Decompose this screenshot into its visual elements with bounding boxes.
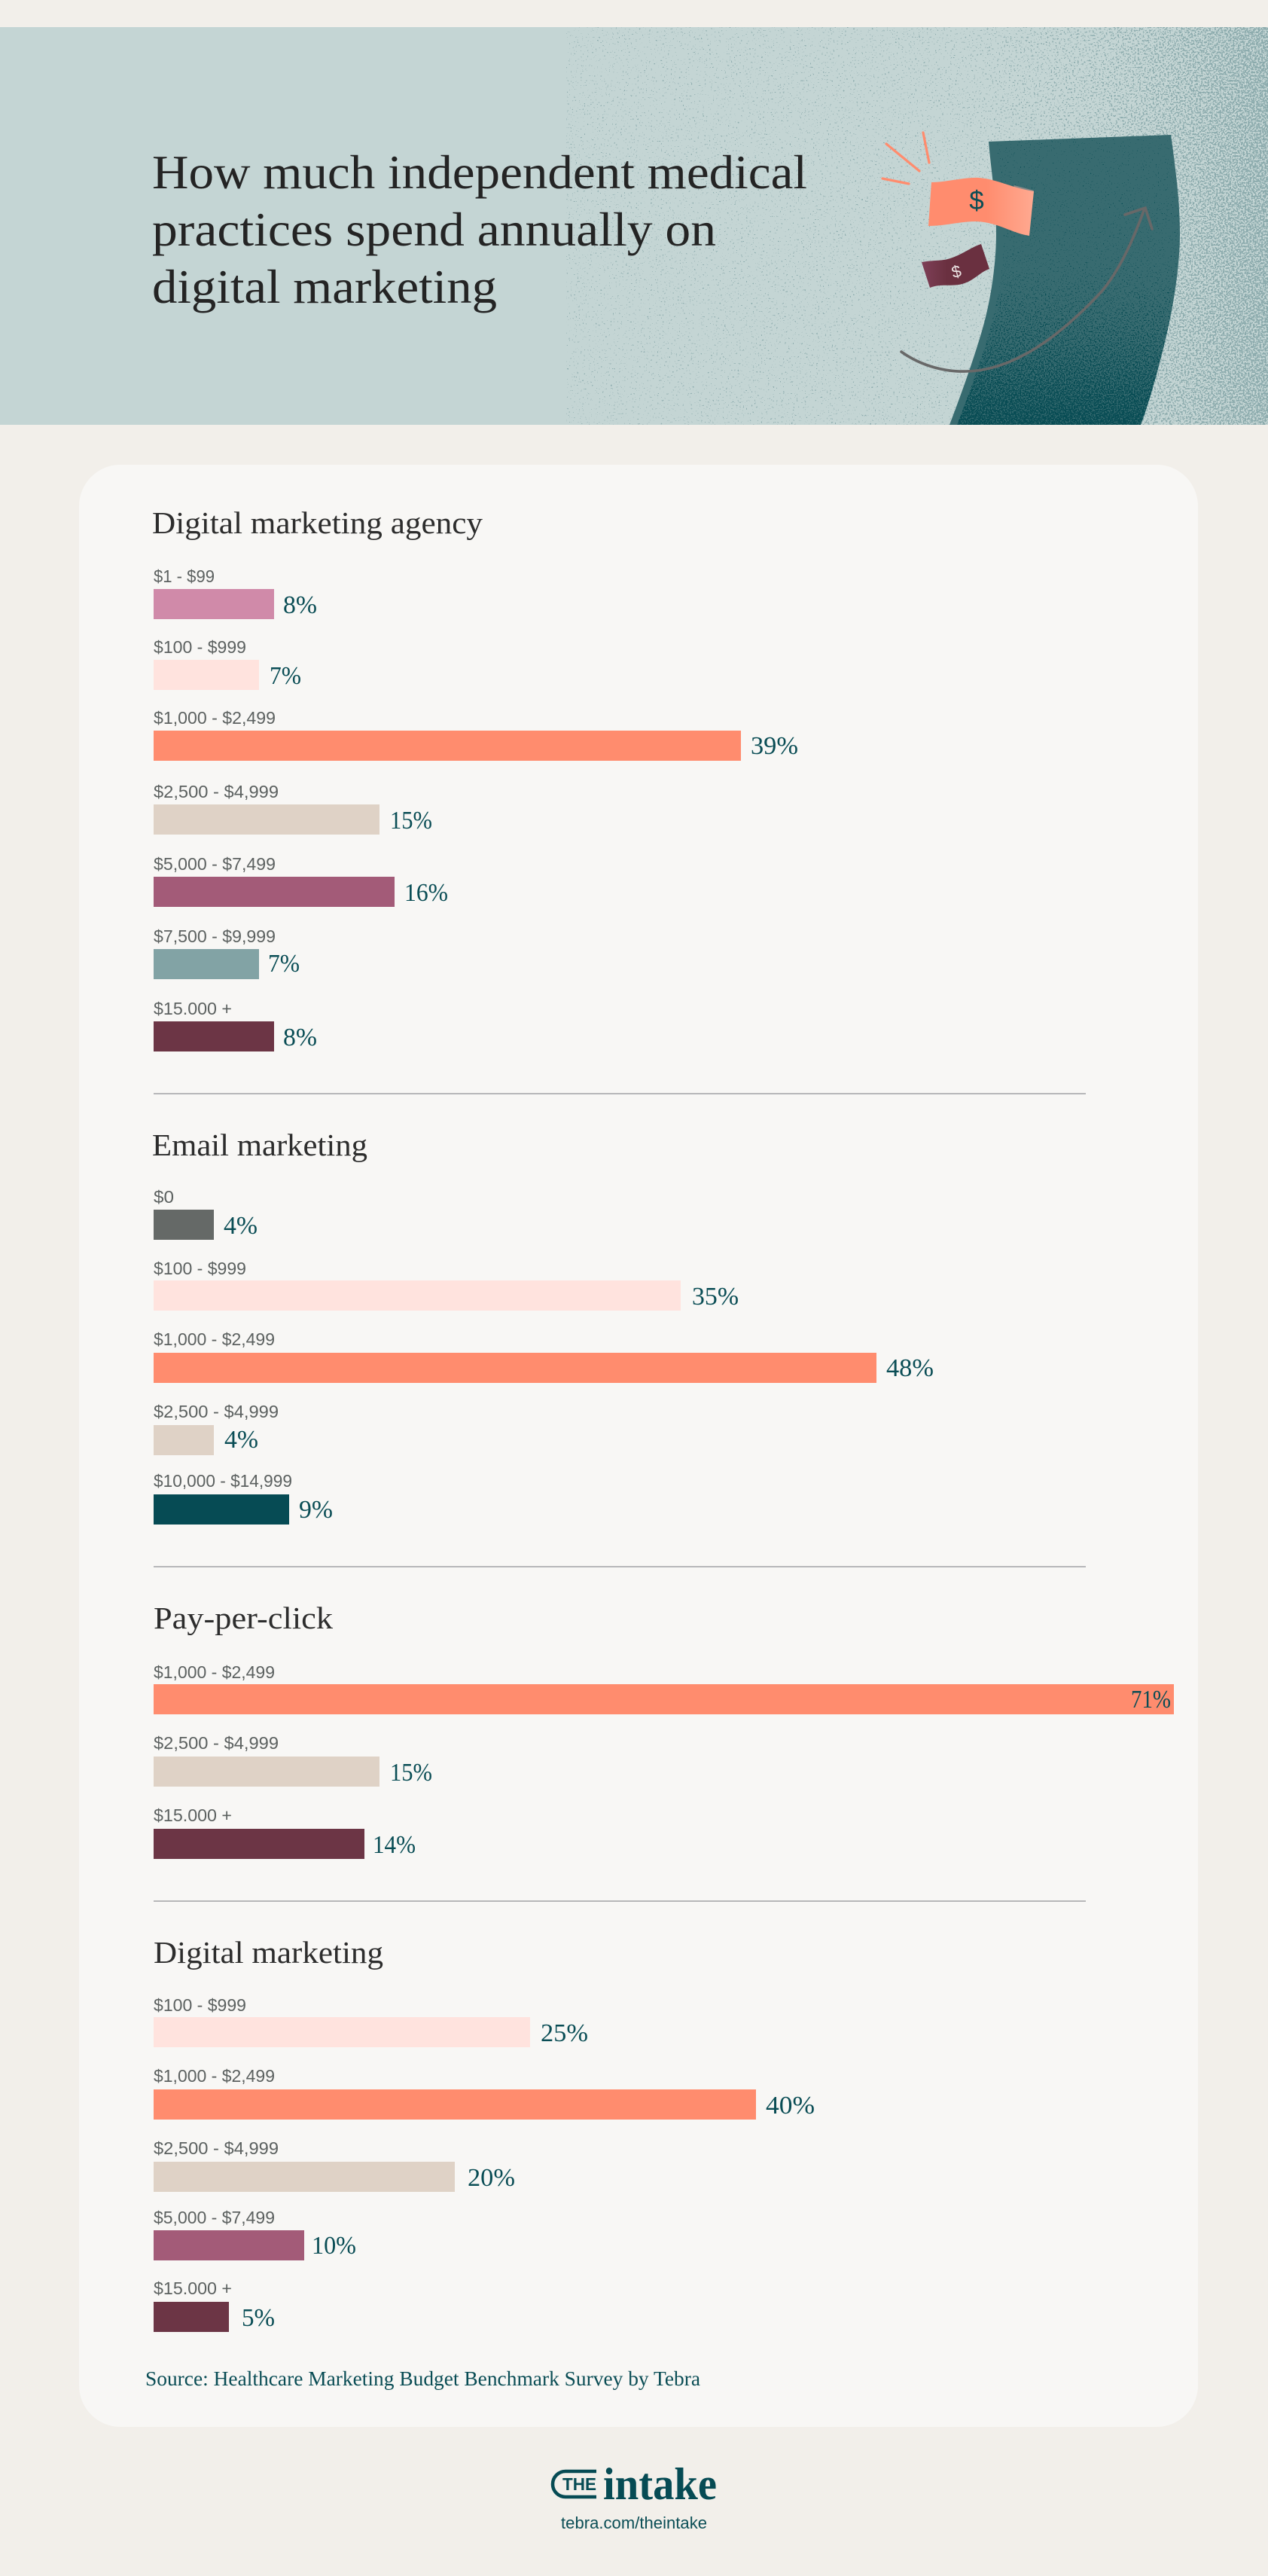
bar: $5,000 - $7,499, 16% xyxy=(154,854,448,907)
bar: $2,500 - $4,999, 20%: 20% xyxy=(468,2164,515,2192)
bar: $1,000 - $2,499, 39%: $1,000 - $2,499 xyxy=(154,708,276,728)
illustration: rising teal arch xyxy=(949,135,1187,425)
bar: $1,000 - $2,499, 48%: 48% xyxy=(886,1354,934,1382)
heading: Pay-per-click xyxy=(154,1601,334,1635)
panel: email marketing xyxy=(152,1128,934,1525)
bar: $15.000 +, 5%: $15.000 + xyxy=(154,2278,232,2298)
bar: $100 - $999, 7% xyxy=(154,637,301,690)
bar: $1,000 - $2,499, 39% xyxy=(154,708,798,761)
source note: Source: Healthcare Marketing Budget Benchmark Survey by Tebra xyxy=(145,2367,700,2390)
title: practices spend annually on xyxy=(152,203,716,256)
bar: $10,000 - $14,999, 9%: $10,000 - $14,999 xyxy=(154,1471,292,1491)
title xyxy=(152,146,807,313)
bar: $2,500 - $4,999, 15% xyxy=(154,782,432,835)
bar: $1 - $99, 8%: 8% xyxy=(283,591,317,619)
bar: $15.000 +, 14%: 14% xyxy=(373,1831,416,1859)
bar: $100 - $999, 7%: 7% xyxy=(270,662,301,690)
bar: $1,000 - $2,499, 48% xyxy=(154,1329,934,1383)
bar: $2,500 - $4,999, 20% xyxy=(154,2138,515,2192)
bar: $2,500 - $4,999, 20%: $2,500 - $4,999 xyxy=(154,2138,279,2158)
bar: $1,000 - $2,499, 71% xyxy=(154,1662,1174,1714)
bar: $100 - $999, 7%: $100 - $999 xyxy=(154,637,246,657)
icon: wine dollar bill: $ xyxy=(949,261,963,282)
bar: $2,500 - $4,999, 15%: $2,500 - $4,999 xyxy=(154,782,279,801)
panel: digital marketing agency xyxy=(152,505,798,1051)
bar: $2,500 - $4,999, 4% xyxy=(154,1402,279,1455)
heading: Digital marketing xyxy=(154,1935,383,1970)
bar: $15.000 +, 5% xyxy=(154,2278,275,2332)
panel: survey results card xyxy=(79,465,1198,2427)
bar: $0, 4%: 4% xyxy=(224,1212,258,1240)
bar: $15.000 +, 8% xyxy=(154,999,317,1051)
bar: $100 - $999, 35%: 35% xyxy=(692,1283,739,1311)
title: How much independent medical xyxy=(152,146,807,199)
bar: $2,500 - $4,999, 15%: $2,500 - $4,999 xyxy=(154,1733,279,1753)
bar: $2,500 - $4,999, 15% xyxy=(154,1733,432,1787)
bar: $0, 4%: $0 xyxy=(154,1187,174,1207)
bar: $15.000 +, 5%: 5% xyxy=(242,2304,275,2332)
bar: $1,000 - $2,499, 48%: $1,000 - $2,499 xyxy=(154,1329,275,1349)
bar: $10,000 - $14,999, 9% xyxy=(154,1471,333,1525)
footer logo: The Intake xyxy=(553,2459,717,2509)
bar: $1,000 - $2,499, 71%: $1,000 - $2,499 xyxy=(154,1662,275,1682)
bar: $7,500 - $9,999, 7%: $7,500 - $9,999 xyxy=(154,926,276,946)
bar: $2,500 - $4,999, 15%: 15% xyxy=(390,807,432,835)
bar: $5,000 - $7,499, 10%: 10% xyxy=(312,2232,356,2260)
bar: $1 - $99, 8% xyxy=(154,566,317,619)
icon: coral spark lines xyxy=(882,133,929,184)
bar: $1 - $99, 8%: $1 - $99 xyxy=(154,566,215,586)
bar: $1,000 - $2,499, 40% xyxy=(154,2066,815,2120)
bar: $5,000 - $7,499, 10%: $5,000 - $7,499 xyxy=(154,2208,275,2227)
bar: $100 - $999, 25%: 25% xyxy=(541,2019,588,2047)
logo wordmark: intake xyxy=(603,2459,717,2509)
bar: $15.000 +, 8%: 8% xyxy=(283,1024,317,1051)
bar: $0, 4% xyxy=(154,1187,258,1240)
footer url: tebra.com/theintake xyxy=(561,2513,707,2532)
arrow: upward growth curve xyxy=(901,208,1152,371)
icon: wine dollar bill xyxy=(922,244,989,288)
panel: pay-per-click xyxy=(154,1601,1174,1859)
bar: $100 - $999, 25% xyxy=(154,1995,588,2047)
bar: $1,000 - $2,499, 39%: 39% xyxy=(751,732,798,760)
bar: $5,000 - $7,499, 16%: 16% xyxy=(404,879,448,907)
bar: $2,500 - $4,999, 4%: $2,500 - $4,999 xyxy=(154,1402,279,1421)
bar: $7,500 - $9,999, 7% xyxy=(154,926,300,979)
bar: $7,500 - $9,999, 7%: 7% xyxy=(268,950,300,978)
bar: $15.000 +, 14%: $15.000 + xyxy=(154,1805,232,1825)
bar: $1,000 - $2,499, 71%: 71% xyxy=(1131,1686,1171,1714)
header banner xyxy=(0,27,1268,425)
bar: $2,500 - $4,999, 4%: 4% xyxy=(224,1426,258,1454)
bar: $15.000 +, 8%: $15.000 + xyxy=(154,999,232,1018)
bar: $100 - $999, 35% xyxy=(154,1259,739,1311)
bar: $5,000 - $7,499, 16%: $5,000 - $7,499 xyxy=(154,854,276,874)
bar: $5,000 - $7,499, 10% xyxy=(154,2208,356,2260)
bar: $100 - $999, 35%: $100 - $999 xyxy=(154,1259,246,1278)
icon: coral dollar bill: $ xyxy=(969,186,984,215)
bar: $2,500 - $4,999, 15%: 15% xyxy=(390,1759,432,1787)
bar: $15.000 +, 14% xyxy=(154,1805,416,1859)
title: digital marketing xyxy=(152,261,497,313)
logo pill with THE xyxy=(553,2471,596,2497)
bar: $1,000 - $2,499, 40%: $1,000 - $2,499 xyxy=(154,2066,275,2086)
bar: $1,000 - $2,499, 40%: 40% xyxy=(766,2092,815,2120)
logo pill with THE: THE xyxy=(562,2474,596,2494)
icon: coral dollar bill xyxy=(928,178,1034,236)
bar: $10,000 - $14,999, 9%: 9% xyxy=(299,1496,333,1524)
bar: $100 - $999, 25%: $100 - $999 xyxy=(154,1995,246,2015)
panel: digital marketing xyxy=(154,1935,815,2332)
heading: Digital marketing agency xyxy=(152,505,483,540)
heading: Email marketing xyxy=(152,1128,367,1162)
